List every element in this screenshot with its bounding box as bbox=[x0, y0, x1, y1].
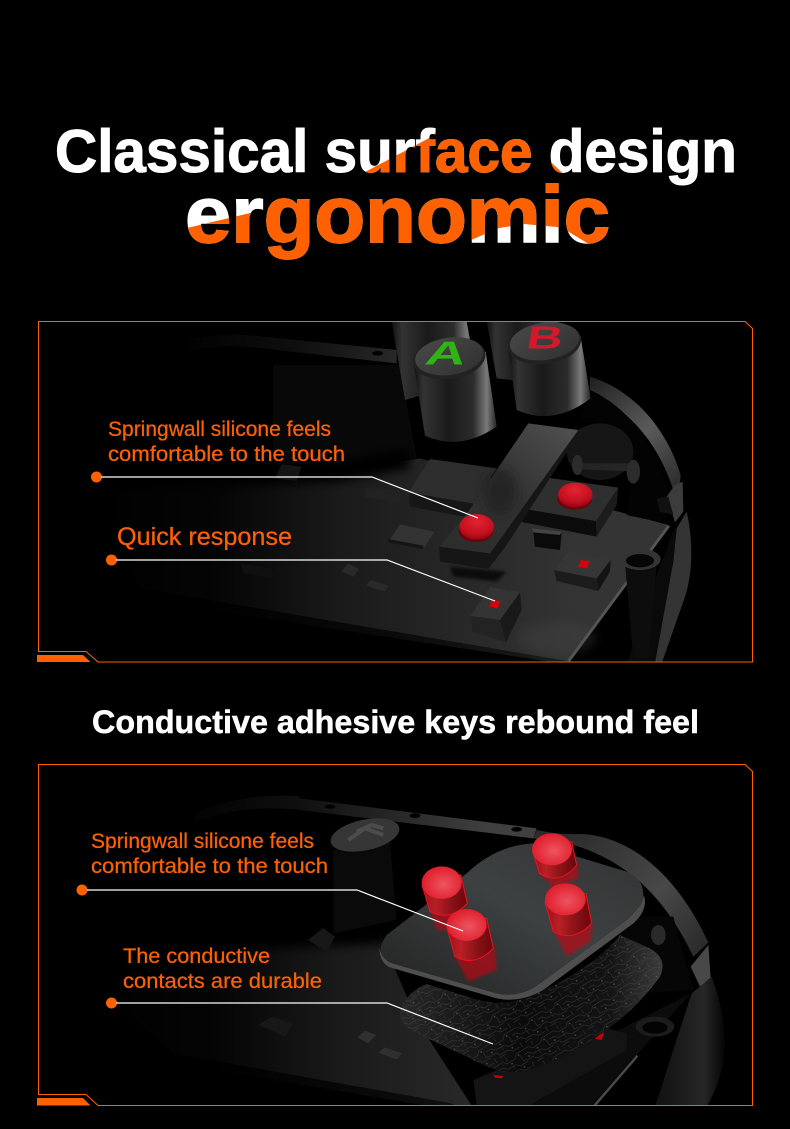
heading: conductive adhesive keys: Conductive adhesive keys rebound feel bbox=[92, 704, 699, 740]
title: Classical surface design ergonomic: Classical surface design bbox=[55, 118, 737, 185]
button A: A bbox=[422, 335, 471, 372]
small contacts bbox=[342, 563, 359, 577]
button B bbox=[505, 318, 591, 416]
screw post bbox=[625, 566, 656, 646]
panel frame bbox=[37, 764, 752, 1106]
callout: quick response: Quick response bbox=[117, 523, 292, 551]
title: Classical surface design ergonomic: Classical surface design bbox=[55, 118, 737, 185]
button B: B bbox=[524, 320, 566, 355]
panel: springwall silicone and quick response bbox=[37, 318, 752, 664]
callout: quick response bbox=[106, 523, 495, 601]
callout: springwall silicone: Springwall silicone feels bbox=[108, 418, 331, 441]
rear cylinders bbox=[392, 322, 477, 400]
stick cap bbox=[330, 818, 400, 933]
right shell bbox=[590, 377, 681, 490]
red dome right bbox=[557, 483, 593, 510]
right block bbox=[520, 508, 597, 537]
red dome left bbox=[459, 514, 494, 542]
panel: conductive adhesive keys bbox=[37, 764, 752, 1109]
controller illustration: silicone pad and circuit board bbox=[238, 796, 723, 1105]
red key rear right bbox=[532, 833, 577, 878]
small contacts bbox=[357, 1031, 376, 1043]
shadows on plate bbox=[450, 567, 507, 582]
T bar bbox=[440, 446, 568, 569]
faint keys on plate bbox=[275, 464, 302, 481]
callout: springwall silicone bbox=[76, 830, 463, 931]
screw post bbox=[636, 1017, 674, 1037]
right shell bbox=[533, 830, 708, 957]
red key rear left bbox=[422, 866, 467, 915]
faint keys on plate bbox=[308, 928, 335, 948]
title: Classical surface design ergonomic bbox=[55, 118, 737, 259]
silicone pad bbox=[379, 843, 645, 1000]
front key block bbox=[488, 620, 506, 642]
lower plate and block bbox=[527, 993, 691, 1107]
button A bbox=[410, 333, 497, 442]
red key front right bbox=[545, 883, 592, 936]
callout: springwall silicone: Springwall silicone feels bbox=[91, 830, 314, 853]
controller illustration: exposed buttons and plate bbox=[238, 322, 692, 662]
left block bbox=[409, 493, 474, 516]
callout: springwall silicone: comfortable to the touch bbox=[91, 855, 328, 878]
callout: conductive contacts: The conductive bbox=[123, 945, 270, 968]
red key glow shadows bbox=[430, 863, 593, 982]
callout: conductive contacts bbox=[106, 945, 493, 1044]
small flat key bbox=[388, 524, 434, 549]
title: Classical surface design ergonomic: ergonomic bbox=[185, 170, 610, 259]
panel frame bbox=[37, 322, 752, 662]
right key block bbox=[554, 570, 598, 591]
title: Classical surface design ergonomic: ergonomic bbox=[185, 170, 610, 259]
circuit board bbox=[400, 935, 663, 1072]
callout: springwall silicone: comfortable to the touch bbox=[108, 443, 345, 466]
soft top edge of plate bbox=[238, 934, 383, 948]
callout: conductive contacts: contacts are durable bbox=[123, 970, 322, 993]
rear axle bbox=[582, 464, 628, 472]
callout: springwall silicone bbox=[91, 418, 478, 518]
soft top edge of plate bbox=[238, 460, 412, 484]
red key front left bbox=[447, 909, 493, 960]
